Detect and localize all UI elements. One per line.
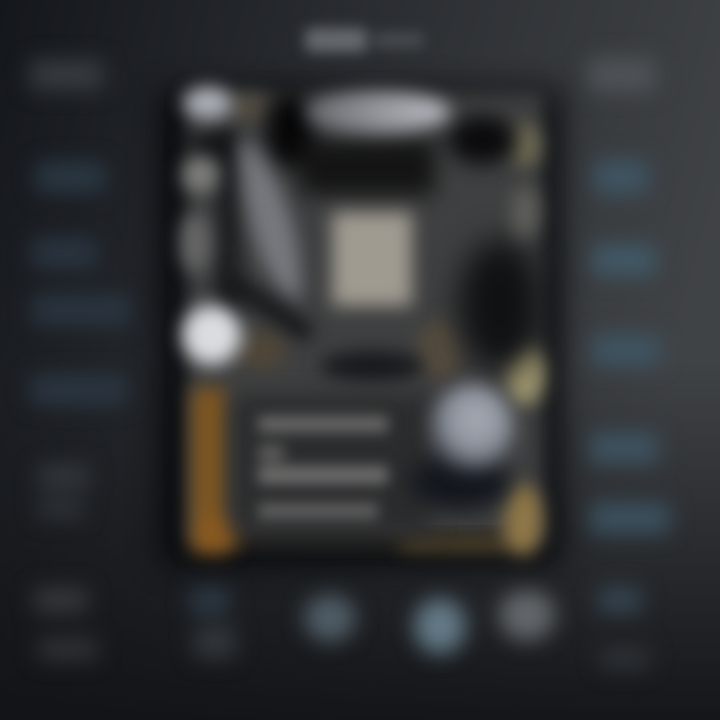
- panel shadow: [160, 90, 560, 565]
- right dark blob: [458, 239, 542, 371]
- gold frame: [191, 94, 544, 556]
- mid dark band: [320, 351, 424, 381]
- dark diagonal under feather: [228, 280, 310, 335]
- left column labels: [30, 60, 132, 660]
- panel body: [186, 92, 544, 544]
- lower list panel: [232, 395, 432, 535]
- dark top blocks: [186, 92, 516, 195]
- right pale column: [511, 186, 539, 238]
- top white bar: [306, 92, 450, 132]
- title: [305, 28, 424, 52]
- globe orb: [430, 384, 514, 472]
- central beige card: [332, 212, 412, 306]
- left white spots: [180, 87, 242, 365]
- panel left dark channel: [216, 130, 240, 350]
- feather shape: [240, 135, 301, 300]
- dark navy shadow under orb: [410, 452, 510, 512]
- central panel: [160, 87, 560, 565]
- right column labels: [588, 58, 670, 669]
- panel bottom dark band: [225, 535, 505, 551]
- bottom row icons: [190, 586, 555, 658]
